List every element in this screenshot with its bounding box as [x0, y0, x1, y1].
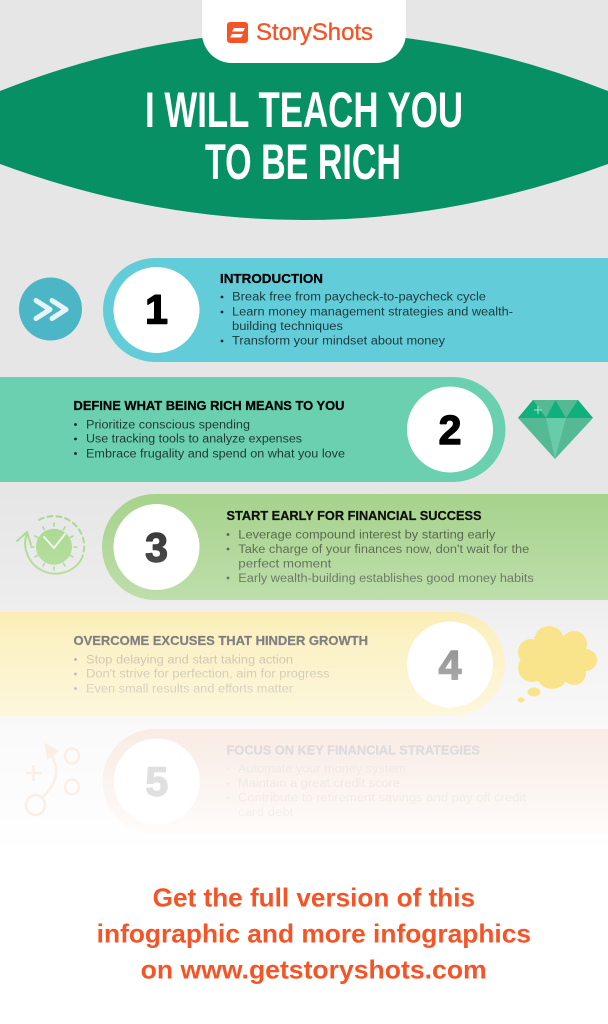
number badge 3: 3 [145, 524, 168, 570]
icon: clock with arrow [17, 516, 84, 574]
title: I WILL TEACH YOU [145, 82, 463, 138]
panel: step 3 start early [102, 494, 608, 600]
bullet list [74, 419, 345, 460]
bullet list: Don't strive for perfection, aim for progress [86, 669, 330, 681]
bullet list: Prioritize conscious spending [86, 419, 250, 431]
call to action: infographic and more infographics [97, 919, 531, 949]
number badge 1: 1 [145, 286, 168, 332]
icon: StoryShots logo [227, 22, 248, 43]
number badge 5: 5 [145, 758, 168, 804]
bullet list [227, 764, 527, 819]
number badge 4: 4 [439, 642, 462, 688]
icon: thought cloud [518, 626, 597, 702]
title [145, 82, 463, 190]
number badge 4 [407, 622, 493, 708]
icon: diamond [518, 400, 593, 459]
bullet list: Transform your mindset about money [232, 336, 445, 348]
bullet list: Break free from paycheck-to-paycheck cycle [232, 292, 486, 304]
icon: strategy play [26, 745, 79, 815]
bullet list: building techniques [232, 321, 343, 333]
call to action: Get the full version of this [153, 883, 475, 913]
heading: introduction: INTRODUCTION [220, 271, 323, 286]
bullet list [227, 529, 534, 585]
heading: key strategies: FOCUS ON KEY FINANCIAL STRATEGIES [226, 742, 480, 757]
bullet list: Stop delaying and start taking action [86, 654, 293, 666]
heading: define rich: DEFINE WHAT BEING RICH MEANS TO YOU [74, 398, 344, 413]
bullet list: card debt [238, 807, 294, 819]
heading: overcome excuses: OVERCOME EXCUSES THAT HINDER GROWTH [74, 633, 368, 648]
call to action: on www.getstoryshots.com [141, 955, 487, 985]
call to action [97, 883, 531, 985]
bullet list: Take charge of your finances now, don't wait for the [238, 544, 529, 556]
panel: step 5 key strategies [103, 729, 608, 834]
panel: step 1 introduction [103, 258, 608, 362]
bullet list [74, 654, 330, 695]
bullet list: perfect moment [238, 559, 332, 571]
number badge 3 [114, 504, 200, 590]
bullet list: Embrace frugality and spend on what you love [86, 448, 345, 460]
number badge 1 [114, 267, 200, 353]
bullet list: Maintain a great credit score [238, 778, 400, 790]
icon: double chevron [19, 278, 82, 340]
title banner [0, 31, 608, 220]
number badge 2 [407, 386, 493, 472]
bullet list: Contribute to retirement savings and pay off credit [238, 793, 527, 805]
bullet list: Early wealth-building establishes good money habits [238, 573, 534, 585]
panel: step 4 overcome excuses [0, 612, 505, 716]
bullet list: Even small results and efforts matter [86, 683, 293, 695]
number badge 2: 2 [439, 407, 461, 453]
number badge 5 [114, 738, 200, 824]
brand name: StoryShots [256, 19, 373, 46]
bullet list: Automate your money system [238, 764, 406, 776]
panel: step 2 define rich [0, 377, 506, 482]
logo tab [202, 0, 406, 63]
bullet list: Leverage compound interest by starting early [238, 529, 496, 541]
white fade overlay [0, 480, 608, 1024]
bullet list: Use tracking tools to analyze expenses [86, 434, 302, 446]
bullet list [221, 292, 513, 348]
heading: start early: START EARLY FOR FINANCIAL SUCCESS [226, 508, 482, 523]
title: TO BE RICH [205, 134, 401, 190]
bullet list: Learn money management strategies and wealth- [232, 306, 513, 318]
